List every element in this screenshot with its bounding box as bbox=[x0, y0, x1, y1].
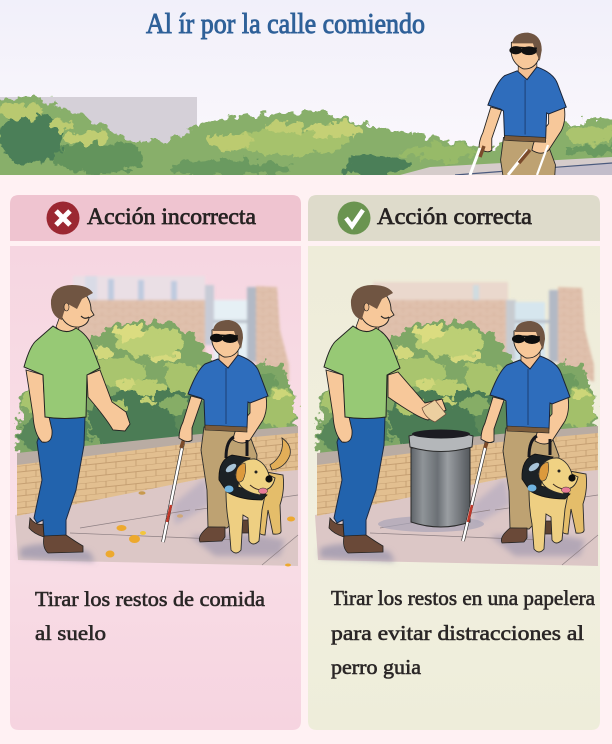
wall and pavement bbox=[15, 426, 298, 566]
man in green shirt bbox=[24, 285, 130, 553]
building bbox=[373, 282, 594, 382]
icon: walking blind man bbox=[478, 32, 567, 175]
man in green shirt bbox=[324, 285, 446, 553]
blind man bbox=[179, 320, 268, 542]
caption: incorrecta: al suelo bbox=[35, 621, 106, 645]
food scrap in hand bbox=[422, 400, 446, 422]
panel body: correcta bbox=[308, 246, 600, 730]
title: Al ír por la calle comiendo bbox=[146, 8, 425, 40]
caption: correcta: perro guia bbox=[331, 655, 422, 679]
illustration: tirar en papelera bbox=[315, 282, 598, 566]
icon: green check bbox=[338, 202, 370, 234]
caption: correcta bbox=[331, 586, 596, 679]
white canes bbox=[470, 145, 548, 175]
icon: red cross bbox=[46, 202, 80, 234]
panel body: incorrecta bbox=[10, 246, 301, 730]
arm and open hand bbox=[87, 370, 130, 431]
caption: correcta: Tirar los restos en una papelera bbox=[331, 586, 596, 610]
arm reaching to bin bbox=[388, 372, 446, 420]
caption: incorrecta: Tirar los restos de comida bbox=[35, 587, 266, 611]
hedge bbox=[318, 321, 598, 462]
blind man bbox=[481, 321, 570, 543]
header: correcta bbox=[308, 195, 600, 241]
wall and pavement bbox=[315, 426, 598, 566]
background building bbox=[0, 97, 197, 147]
illustration: tirar comida al suelo bbox=[15, 276, 298, 566]
panel: acción correcta bbox=[308, 195, 600, 730]
panel: acción incorrecta bbox=[10, 195, 301, 730]
trash can bbox=[378, 430, 484, 532]
caption: incorrecta bbox=[35, 587, 266, 645]
heading: acción correcta: Acción correcta bbox=[377, 204, 532, 229]
guide dog bbox=[219, 437, 290, 553]
hedge bbox=[18, 321, 298, 462]
food scraps bbox=[106, 491, 295, 566]
building bbox=[73, 276, 289, 382]
hedge bbox=[0, 94, 612, 175]
heading: acción incorrecta: Acción incorrecta bbox=[87, 204, 256, 229]
white cane bbox=[463, 436, 489, 541]
top street scene bbox=[0, 0, 612, 175]
white cane bbox=[163, 436, 185, 542]
street bbox=[400, 157, 612, 175]
header: incorrecta bbox=[10, 195, 301, 241]
caption: correcta: para evitar distracciones al bbox=[331, 621, 584, 645]
guide dog bbox=[522, 436, 587, 552]
